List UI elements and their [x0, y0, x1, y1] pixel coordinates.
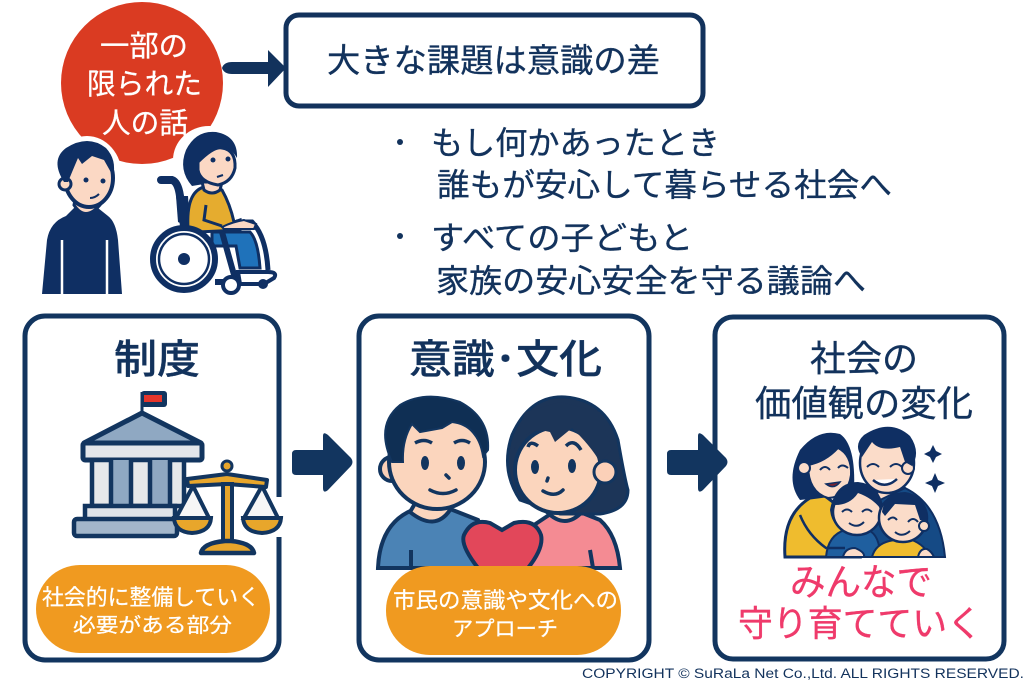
orange label: system: 社会的に整備していく	[42, 585, 260, 610]
issue box	[286, 15, 703, 106]
bullet list: すべての子どもと	[431, 220, 693, 256]
icon: person in wheelchair	[153, 126, 275, 293]
circle text: 一部の	[100, 30, 188, 63]
icon: sparkles	[924, 445, 945, 493]
pink message	[738, 562, 982, 644]
orange label: culture: アプローチ	[452, 618, 558, 641]
heading: change in social values: 社会の	[810, 338, 918, 379]
pink message: みんなで	[790, 562, 932, 603]
circle text	[87, 30, 202, 140]
icon: man	[42, 136, 122, 294]
orange label: culture: 市民の意識や文化への	[393, 588, 618, 613]
icon: government building	[74, 391, 202, 536]
orange label: system: 必要がある部分	[73, 614, 232, 637]
bullet list: 家族の安心安全を守る議論へ	[436, 263, 866, 299]
copyright: COPYRIGHT © SuRaLa Net Co.,Ltd. ALL RIGHTS RESERVED.	[582, 666, 1024, 681]
icon: heart	[463, 522, 541, 568]
orange label: system	[36, 565, 270, 653]
circle text: 限られた	[87, 69, 202, 101]
icon: balance scale	[174, 461, 281, 553]
issue box: 大きな課題は意識の差	[327, 42, 660, 79]
arrow: system to culture	[292, 433, 352, 492]
circle text: 人の話	[102, 108, 188, 140]
orange label: culture	[386, 566, 621, 655]
arrow: culture to values	[667, 433, 728, 492]
heading: change in social values	[755, 338, 973, 424]
bullet list	[397, 125, 892, 299]
illustration: couple with heart	[378, 397, 628, 568]
bullet list: もし何かあったとき	[431, 125, 720, 161]
arrow: circle to issue box	[222, 50, 286, 87]
panel: change in social values	[715, 317, 1004, 659]
bullet list: 誰もが安心して暮らせる社会へ	[437, 167, 892, 203]
illustration: family	[785, 427, 945, 557]
panel: awareness and culture	[359, 316, 649, 660]
panel: system	[25, 316, 284, 660]
pink message: 守り育てていく	[738, 603, 982, 644]
heading: awareness and culture: 意識･文化	[409, 338, 602, 382]
heading: system: 制度	[114, 338, 200, 382]
heading: change in social values: 価値観の変化	[755, 383, 973, 424]
red speech circle	[61, 2, 223, 164]
